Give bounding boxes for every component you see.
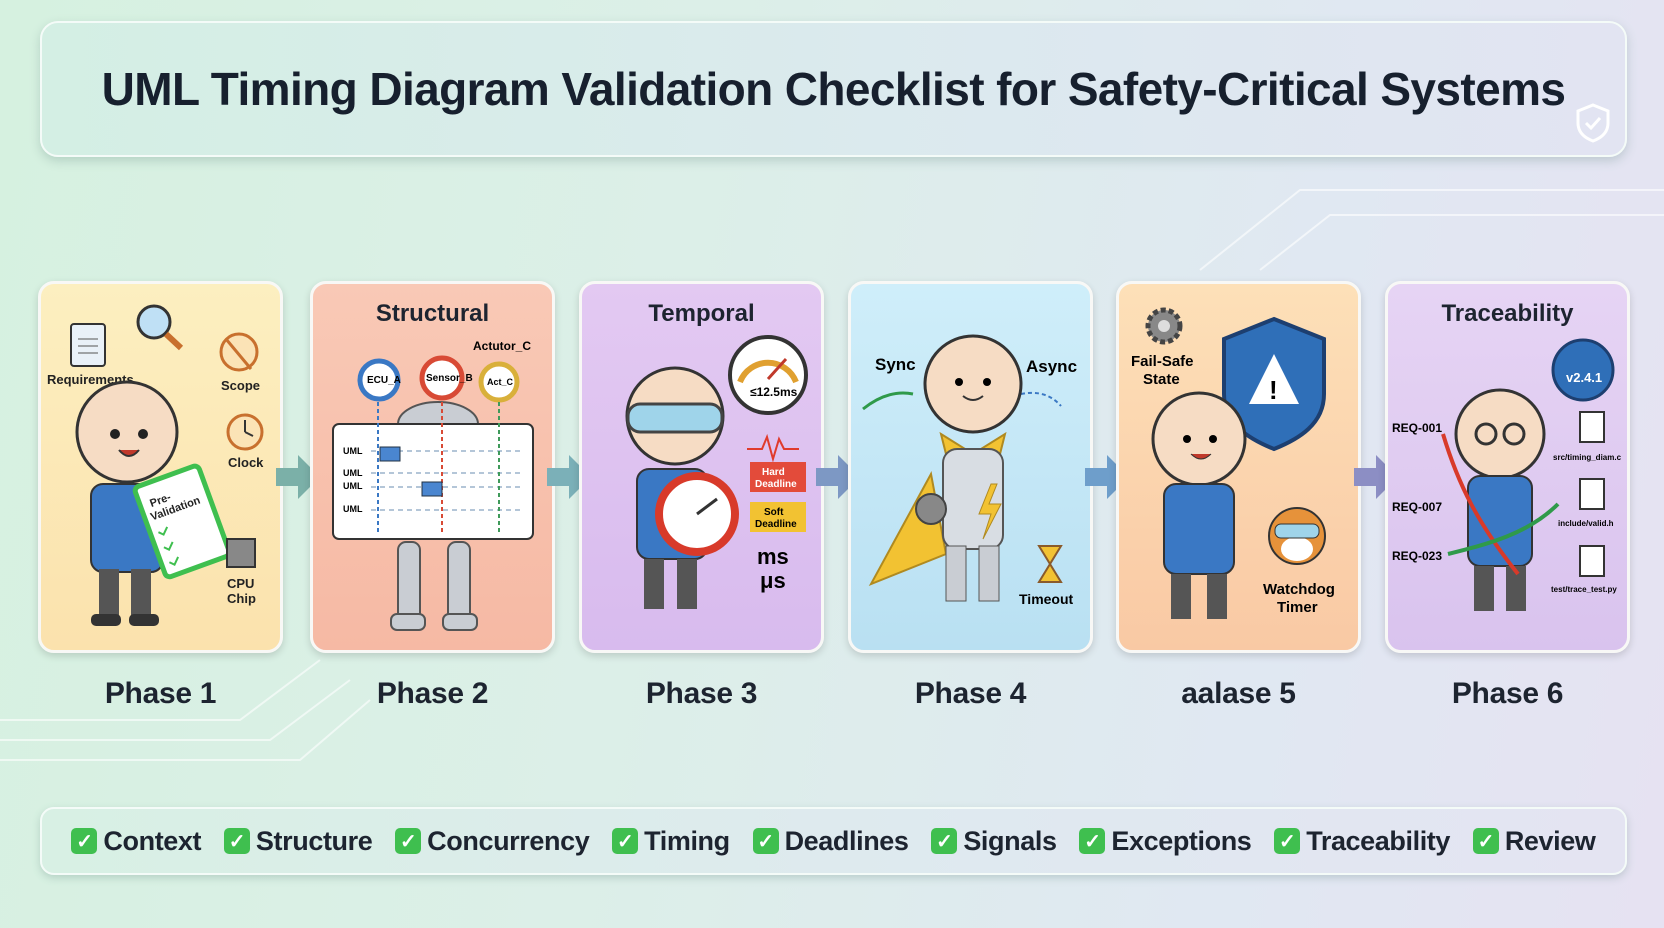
text: Phase 6: [1452, 677, 1563, 710]
character with clipboard: Validation: [149, 494, 202, 523]
arrow 3: [816, 455, 848, 499]
panel: phase 6 traceability: [1385, 281, 1630, 653]
checklist bar: ✓: [936, 830, 952, 852]
files: test/trace_test.py: [1551, 585, 1617, 594]
panel: phase 4: [848, 281, 1093, 653]
checklist bar: Exceptions: [1111, 826, 1251, 856]
checklist bar: ✓: [757, 830, 774, 852]
icon: shield warning: !: [1269, 375, 1278, 405]
character with stopwatch: [627, 368, 735, 609]
character with clipboard: Pre-: [148, 491, 173, 510]
checklist bar: Signals: [963, 826, 1057, 856]
text: Phase 2: [377, 677, 488, 710]
text: aalase 5: [1181, 677, 1296, 710]
title: [40, 21, 1627, 157]
watchdog: Watchdog: [1263, 581, 1335, 598]
phase labels: Phase 1: [105, 677, 216, 710]
icon: CPU chip: CPU: [227, 576, 254, 591]
checklist bar: Concurrency: [427, 826, 589, 856]
hourglass timeout: Timeout: [1019, 591, 1074, 607]
timing diagram board: UML: [343, 446, 363, 456]
panel: phase 3 temporal: [579, 281, 824, 653]
icon: magnifier: [138, 306, 181, 348]
text: Phase 3: [646, 677, 757, 710]
icon: gear fail-safe: [1131, 310, 1194, 388]
version badge: v2.4.1: [1566, 370, 1602, 385]
sync / async labels: Async: [1026, 357, 1077, 376]
checklist bar: ✓: [617, 830, 633, 852]
icon: CPU chip: [227, 539, 256, 606]
gauge: ≤12.5ms: [750, 385, 798, 399]
sync / async labels: Sync: [875, 355, 916, 374]
panel: phase 6 traceability: Traceability: [1441, 300, 1574, 327]
icon: gear fail-safe: State: [1143, 371, 1180, 388]
icon: gear fail-safe: Fail-Safe: [1131, 353, 1194, 370]
arrow 5: [1354, 455, 1385, 499]
panel: phase 3 temporal: Temporal: [648, 300, 755, 327]
panel: phase 2 structural: [310, 281, 555, 653]
watchdog: [1263, 508, 1335, 616]
icon: CPU chip: Chip: [227, 591, 256, 606]
files: src/timing_diam.c: [1553, 453, 1622, 462]
badges: [360, 339, 531, 400]
heartbeat: [747, 437, 799, 459]
deadline flags: Deadline: [755, 519, 797, 530]
deadline flags: μs: [760, 568, 786, 593]
checklist bar: Structure: [256, 826, 372, 856]
icon: scope: [221, 334, 260, 393]
requirement ids: REQ-023: [1392, 549, 1442, 563]
icon: scope: Scope: [221, 378, 260, 393]
badges: Actutor_C: [473, 339, 531, 353]
icon: shield check: [1576, 104, 1610, 142]
superhero character: [871, 336, 1021, 601]
character with clipboard: [77, 382, 231, 626]
watchdog: Timer: [1277, 599, 1318, 616]
character: [1443, 390, 1558, 611]
version badge: [1553, 340, 1613, 400]
timing diagram board: UML: [343, 504, 363, 514]
checklist bar: Context: [103, 826, 201, 856]
checklist bar: ✓: [1279, 830, 1295, 852]
icon: shield warning: [1224, 319, 1324, 449]
deadline flags: ms: [757, 544, 789, 569]
panel: phase 2 structural: Structural: [376, 300, 489, 327]
icon: document: [47, 324, 134, 387]
checklist bar: ✓: [76, 830, 93, 852]
checklist bar: ✓: [1478, 830, 1494, 852]
checklist bar: Review: [1505, 826, 1595, 856]
panel: phase 1: [38, 281, 283, 653]
checklist bar: Traceability: [1306, 826, 1450, 856]
icon: clock: [228, 415, 264, 470]
checklist bar: ✓: [1084, 830, 1101, 852]
robot legs: [391, 542, 477, 630]
checklist bar: Timing: [644, 826, 730, 856]
timing diagram board: [333, 402, 533, 539]
requirement ids: [1392, 421, 1442, 563]
arrow 1: [276, 455, 310, 499]
badges: ECU_A: [367, 375, 401, 386]
hourglass timeout: [1019, 546, 1074, 607]
deadline flags: [750, 462, 806, 593]
deadline flags: Hard: [762, 467, 785, 478]
files: include/valid.h: [1558, 519, 1614, 528]
gauge: [730, 337, 806, 413]
requirement ids: REQ-007: [1392, 500, 1442, 514]
icon: document: Requirements: [47, 372, 134, 387]
deadline flags: Deadline: [755, 479, 797, 490]
sync / async labels: [863, 355, 1077, 409]
character: [1153, 393, 1245, 619]
deadline flags: Soft: [764, 507, 784, 518]
badges: Act_C: [487, 377, 514, 387]
requirement ids: REQ-001: [1392, 421, 1442, 435]
files: [1551, 412, 1622, 594]
badges: Sensor_B: [426, 373, 473, 384]
timing diagram board: UML: [343, 481, 363, 491]
timing diagram board: UML: [343, 468, 363, 478]
arrow 4: [1085, 455, 1116, 499]
checklist bar: [40, 807, 1627, 875]
arrow 2: [547, 455, 579, 499]
title: UML Timing Diagram Validation Checklist for Safety-Critical Systems: [102, 63, 1565, 115]
panel: phase 5: [1116, 281, 1361, 653]
text: Phase 4: [915, 677, 1026, 710]
checklist bar: ✓: [229, 830, 245, 852]
robot head: [398, 402, 478, 446]
checklist bar: Deadlines: [785, 826, 909, 856]
checklist bar: ✓: [400, 830, 416, 852]
icon: clock: Clock: [228, 455, 264, 470]
